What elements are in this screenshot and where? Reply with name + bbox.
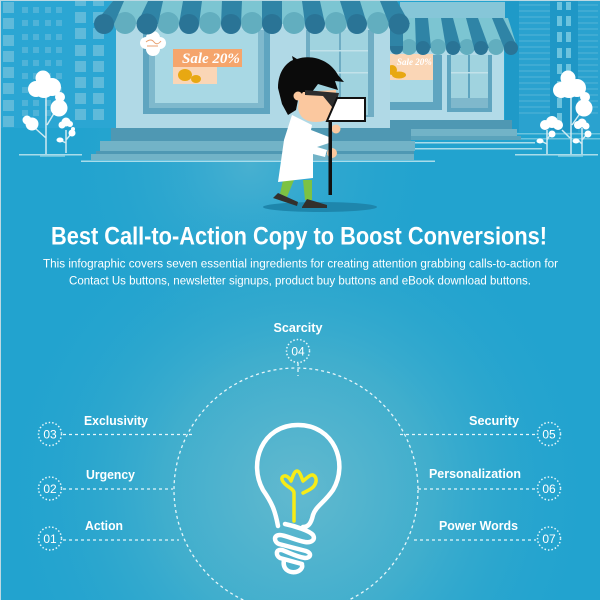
sign: sale poster (173, 49, 242, 84)
illustration: second shop awning (390, 18, 518, 55)
item: 02 Urgency (38, 468, 135, 500)
sign: sale poster: Sale 20% (182, 51, 240, 67)
item: 07 Power Words: Power Words (439, 519, 518, 533)
illustration: right trees (515, 70, 598, 157)
character hands (327, 124, 340, 158)
intro text: Contact Us buttons, newsletter signups, product buy buttons and eBook download buttons. (69, 276, 531, 288)
item: 04 Scarcity: 04 (291, 344, 305, 358)
item: 01 Action: 01 (43, 532, 57, 546)
bulb filament (282, 471, 316, 521)
character legs (280, 180, 312, 200)
item: 04 Scarcity: Scarcity (274, 321, 323, 335)
illustration: city buildings right (505, 0, 600, 140)
illustration: second shop (390, 2, 542, 150)
item: 05 Security: 05 (542, 428, 556, 442)
intro text: This infographic covers seven essential ingredients for creating attention grabbing calls-to-action for (43, 258, 558, 270)
item: 07 Power Words: 07 (542, 532, 556, 546)
bulb screw base (275, 524, 314, 572)
item: 02 Urgency: Urgency (86, 468, 135, 482)
illustration: main shop wall (116, 0, 390, 128)
character pole (328, 118, 332, 195)
item: 06 Personalization: Personalization (429, 467, 521, 481)
item: 02 Urgency: 02 (43, 482, 57, 496)
item: 05 Security: Security (469, 414, 519, 428)
icon: light bulb (257, 425, 339, 572)
illustration: left tree (19, 70, 82, 157)
connector lines (63, 363, 536, 540)
sign: second shop sale: Sale 20% (397, 57, 432, 67)
item: 06 Personalization: 06 (542, 482, 556, 496)
item: 04 Scarcity (274, 321, 323, 362)
item: 03 Exclusivity (38, 414, 148, 446)
character shoes (273, 193, 327, 208)
item: 07 Power Words (439, 519, 560, 550)
item: 01 Action: Action (85, 519, 123, 533)
character shadow (263, 202, 377, 212)
sign: cloud bubble (140, 31, 166, 56)
character glasses (305, 90, 339, 110)
item: 03 Exclusivity: 03 (43, 428, 57, 442)
illustration: character holding sign (263, 56, 377, 212)
character face (298, 90, 336, 122)
bulb glass (257, 425, 339, 527)
character sign board (327, 98, 365, 121)
character coat (278, 115, 332, 182)
item: 06 Personalization (429, 467, 560, 500)
item: 01 Action (38, 519, 123, 550)
item: 03 Exclusivity: Exclusivity (84, 414, 148, 428)
illustration: main shop steps (81, 128, 435, 162)
illustration: city buildings left (1, 0, 116, 128)
item: 05 Security (469, 414, 560, 446)
intro text (43, 258, 558, 288)
dashed circle (174, 368, 418, 600)
sign: second shop sale (387, 54, 433, 80)
illustration: main shop awning (94, 1, 410, 34)
character hair (278, 56, 344, 115)
